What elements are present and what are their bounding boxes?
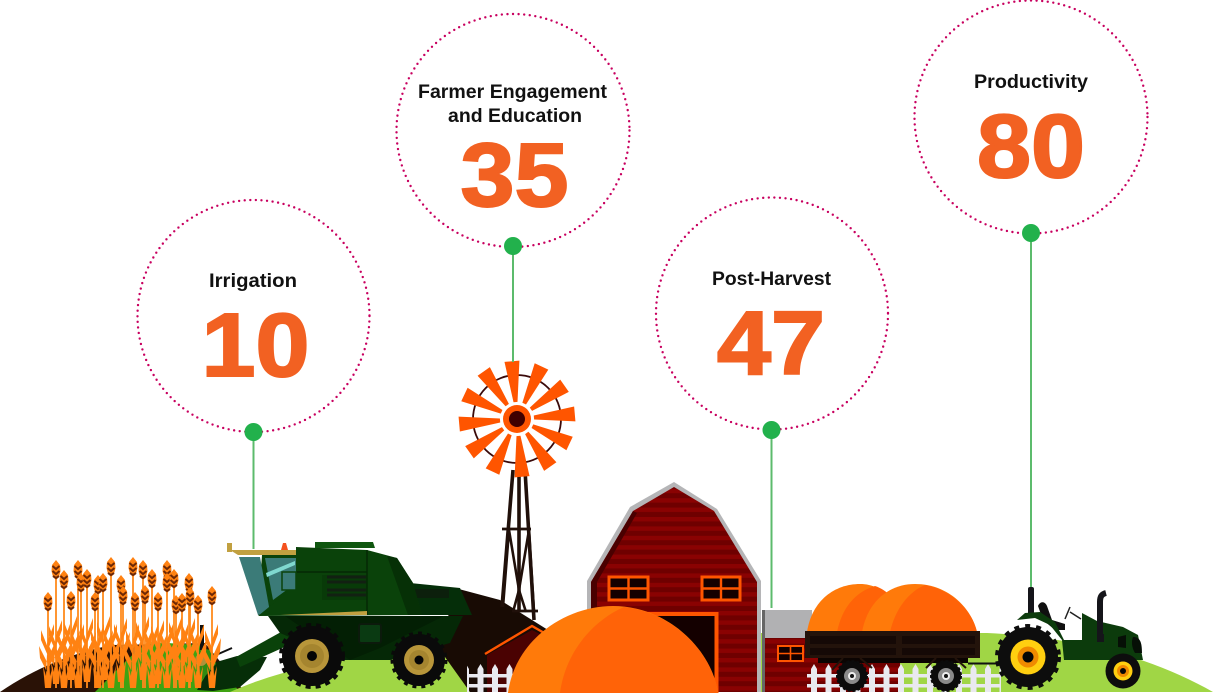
cab glass — [239, 557, 270, 615]
hay bale large — [508, 606, 718, 693]
callout: Irrigation: 10 — [202, 296, 310, 396]
hay bale back — [807, 584, 905, 632]
main barn — [587, 482, 761, 693]
dark hill behind harvester — [440, 588, 548, 692]
wheat field — [39, 557, 221, 688]
steering — [1065, 607, 1081, 619]
right fence — [807, 664, 1001, 692]
engine grille — [1118, 635, 1142, 653]
big rear wheel — [997, 626, 1059, 688]
callout: Farmer Engagement and Education: 35 — [460, 126, 568, 226]
beacon — [281, 543, 288, 550]
rear hood — [410, 583, 472, 615]
barn annex — [762, 610, 900, 692]
hay bale front — [862, 584, 977, 632]
trailer with hay — [805, 584, 1001, 692]
exhaust stack — [1028, 587, 1034, 615]
main body — [258, 547, 422, 616]
barn window right — [702, 577, 740, 600]
callout: Irrigation: Irrigation — [209, 271, 297, 292]
seat — [1038, 602, 1065, 630]
trailer wheel right — [931, 661, 961, 691]
annex window — [778, 646, 803, 661]
callout: Post-Harvest: 47 — [717, 294, 825, 394]
callout: Productivity: Productivity — [974, 72, 1088, 93]
callout: Farmer Engagement and Education: and Education — [448, 106, 582, 127]
barn door — [650, 614, 716, 693]
wheat leaves — [39, 616, 221, 688]
left fence — [467, 664, 515, 692]
callout: Farmer Engagement and Education: Farmer Engagement — [418, 82, 608, 103]
windmill wheel — [459, 361, 575, 477]
tractor — [997, 587, 1143, 688]
lower body — [268, 616, 463, 660]
callout: Productivity: 80 — [977, 97, 1085, 197]
wheat stems — [48, 576, 212, 688]
callout: Post-Harvest: Post-Harvest — [712, 269, 832, 290]
callout: Farmer Engagement and Education — [396, 14, 630, 362]
harvester — [195, 542, 472, 691]
callout: Post-Harvest — [656, 198, 888, 608]
cab roof — [227, 543, 296, 555]
cab frame — [258, 555, 296, 615]
side pipe — [1097, 593, 1106, 642]
windmill tower — [502, 470, 538, 620]
tractor body — [1017, 612, 1143, 660]
trailer box — [805, 631, 998, 670]
front wheel — [281, 625, 343, 687]
small front wheel — [1106, 654, 1140, 688]
trailer wheel left — [837, 661, 867, 691]
barn window left — [609, 577, 648, 600]
ground: soil and grass — [0, 633, 1213, 692]
callout: Productivity — [914, 0, 1148, 587]
rear wheel — [392, 633, 446, 687]
callout: Irrigation — [138, 200, 370, 549]
wheat heads — [44, 557, 216, 615]
harvester header — [195, 625, 300, 691]
small shed — [485, 626, 552, 692]
yellow trim — [280, 611, 367, 615]
